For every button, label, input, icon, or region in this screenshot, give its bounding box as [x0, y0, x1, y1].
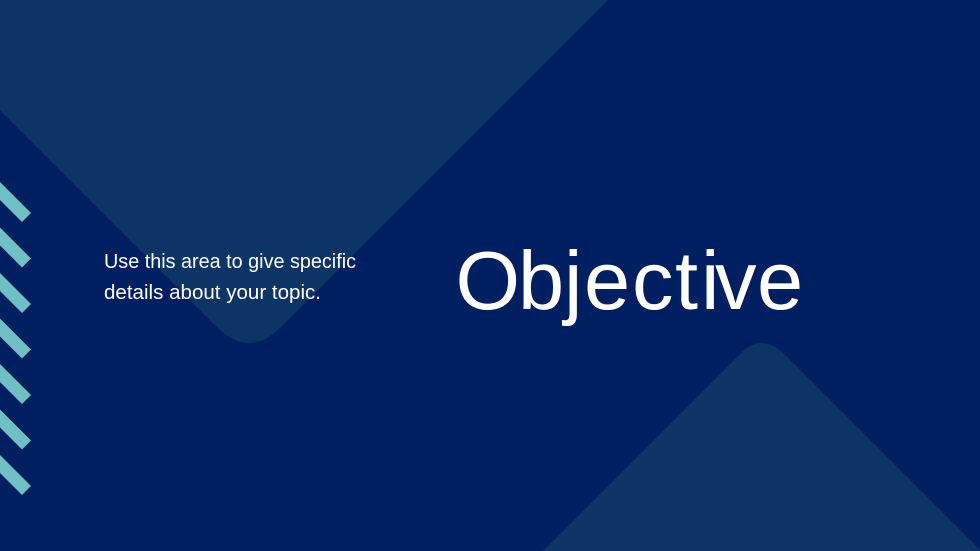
icon: teal diagonal stripes: [0, 182, 31, 495]
text block: topic details: Use this area to give specific: [104, 251, 356, 273]
shape: bottom rounded triangle: [543, 343, 980, 551]
title: Objective: [456, 234, 803, 327]
text block: topic details: details about your topic.: [104, 282, 321, 304]
text block: topic details: [104, 251, 356, 304]
shape: top rounded triangle: [0, 0, 608, 343]
